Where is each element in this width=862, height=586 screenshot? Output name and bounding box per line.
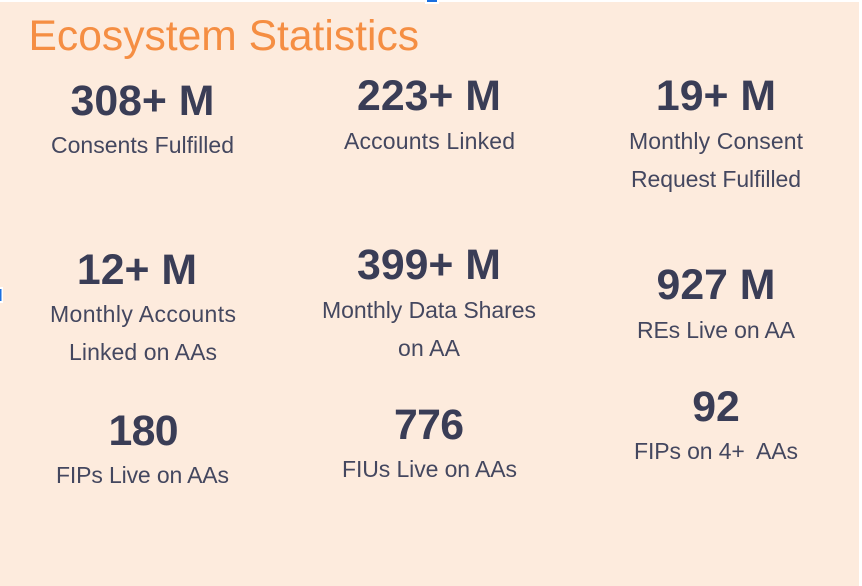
stat: monthly accounts linked: Monthly Accounts [50, 301, 236, 327]
stat: monthly consent request fulfilled: 19+ M [656, 72, 776, 120]
stat: REs live: 927 M [657, 261, 775, 309]
stat: consents fulfilled: 308+ M [71, 77, 214, 125]
stat: FIPs live: 180 [108, 407, 178, 455]
stat: FIPs live [56, 407, 229, 488]
stat: monthly accounts linked: 12+ M [77, 246, 197, 294]
stat: FIUs live [342, 401, 517, 482]
stat: monthly consent request fulfilled: Request Fulfilled [631, 166, 801, 192]
stat: monthly data shares: 399+ M [357, 241, 501, 289]
stat: REs live [637, 261, 796, 343]
stat: REs live: REs Live on AA [637, 317, 796, 343]
stat: consents fulfilled [51, 77, 234, 158]
stat: FIUs live: FIUs Live on AAs [342, 456, 517, 482]
stat: monthly accounts linked: Linked on AAs [69, 339, 217, 365]
stat: FIUs live: 776 [394, 401, 464, 449]
title: Ecosystem Statistics [28, 12, 419, 60]
stat: accounts linked: 223+ M [357, 72, 501, 120]
stat: accounts linked [344, 72, 515, 154]
stat: monthly accounts linked [50, 246, 236, 365]
stat: monthly data shares: on AA [398, 335, 461, 361]
stat: accounts linked: Accounts Linked [344, 128, 515, 154]
selection handle: left [0, 287, 3, 303]
stat: monthly consent request fulfilled [629, 72, 804, 192]
stat: monthly data shares [322, 241, 536, 361]
selection handle: top [425, 0, 439, 4]
stat: monthly consent request fulfilled: Monthly Consent [629, 128, 804, 154]
stat: FIPs on 4+ AAs: FIPs on 4+ AAs [634, 438, 798, 464]
stat: FIPs on 4+ AAs: 92 [692, 383, 740, 431]
stat: monthly data shares: Monthly Data Shares [322, 297, 536, 323]
stat: FIPs live: FIPs Live on AAs [56, 462, 229, 488]
stat: FIPs on 4+ AAs [634, 383, 798, 464]
stat: consents fulfilled: Consents Fulfilled [51, 132, 234, 158]
